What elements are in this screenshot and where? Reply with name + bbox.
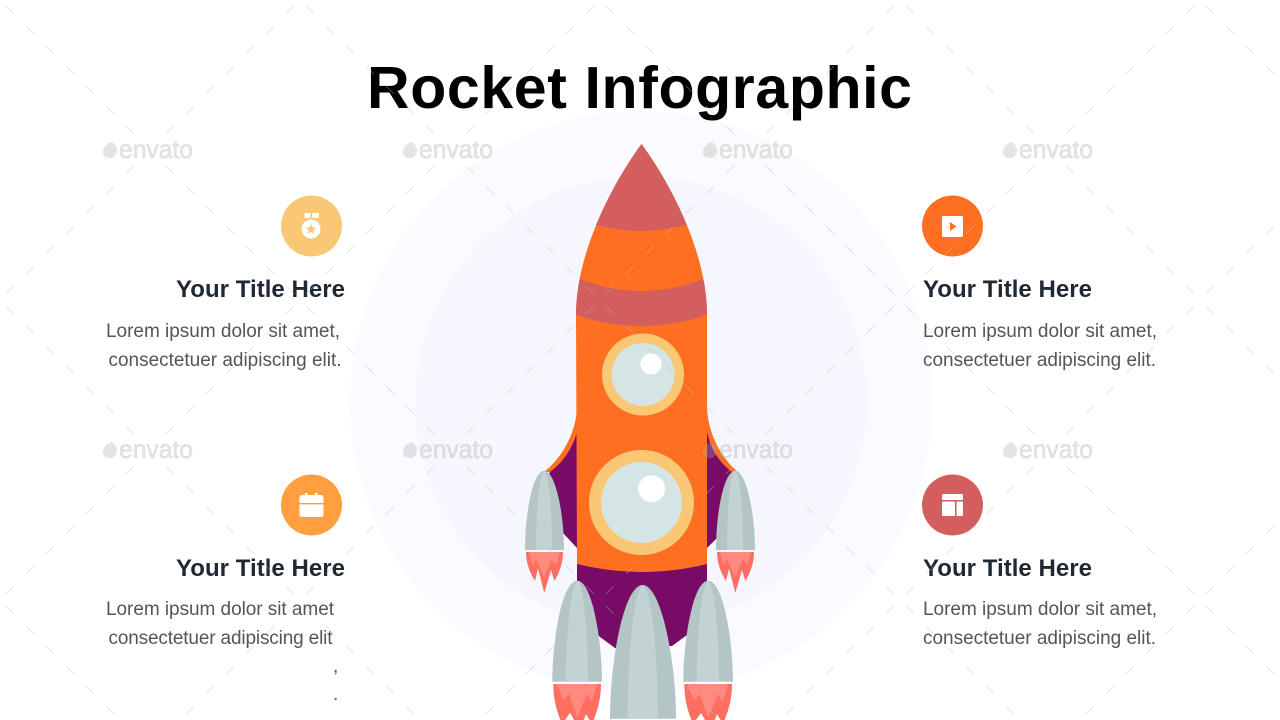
nose stripe — [576, 279, 707, 326]
text block — [923, 599, 1157, 649]
text block: consectetuer adipiscing elit. — [923, 350, 1156, 371]
heading: Your Title Here — [923, 555, 1092, 582]
panel: bottom left — [106, 474, 345, 705]
watermark logos: envato — [719, 134, 793, 164]
watermark logos: envato — [419, 134, 493, 164]
heading: Your Title Here — [923, 276, 1092, 303]
watermark logos — [103, 134, 1093, 464]
right small booster — [716, 471, 755, 593]
background circle: outer — [350, 111, 932, 693]
title: Rocket Infographic — [367, 55, 912, 121]
text block: . — [333, 684, 338, 705]
text block: consectetuer adipiscing elit — [108, 628, 333, 649]
rocket body — [576, 144, 707, 572]
center booster — [610, 585, 676, 719]
text block — [106, 599, 338, 705]
left small booster — [525, 471, 564, 593]
text block: Lorem ipsum dolor sit amet — [106, 599, 335, 620]
icon: layout — [922, 474, 983, 536]
text block: Lorem ipsum dolor sit amet, — [923, 599, 1157, 620]
watermark logos: envato — [119, 434, 193, 464]
panel: top left — [106, 196, 345, 371]
icon: calendar — [281, 474, 342, 536]
rocket lower hull — [577, 560, 707, 648]
watermark logos: envato — [719, 434, 793, 464]
lower window — [589, 450, 694, 555]
nose cone — [596, 144, 687, 231]
watermark logos: envato — [119, 134, 193, 164]
watermark logos: envato — [1019, 134, 1093, 164]
text block — [923, 321, 1157, 371]
right large booster — [683, 581, 733, 720]
text block: , — [333, 656, 338, 677]
left large booster — [552, 581, 602, 720]
text block: consectetuer adipiscing elit. — [108, 350, 342, 371]
upper window — [602, 334, 684, 416]
heading: Your Title Here — [176, 276, 345, 303]
watermark logos: envato — [419, 434, 493, 464]
text block: Lorem ipsum dolor sit amet, — [923, 321, 1157, 342]
heading: Your Title Here — [176, 555, 345, 582]
icon: medal — [281, 196, 342, 256]
icon: play — [922, 196, 983, 256]
text block: Lorem ipsum dolor sit amet, — [106, 321, 340, 342]
watermark logos: envato — [1019, 434, 1093, 464]
text block — [106, 321, 342, 371]
panel: top right — [922, 196, 1157, 371]
rocket fins — [544, 405, 738, 548]
background circle: inner — [415, 176, 867, 628]
text block: consectetuer adipiscing elit. — [923, 628, 1156, 649]
panel: bottom right — [922, 474, 1157, 649]
rocket — [525, 140, 755, 720]
